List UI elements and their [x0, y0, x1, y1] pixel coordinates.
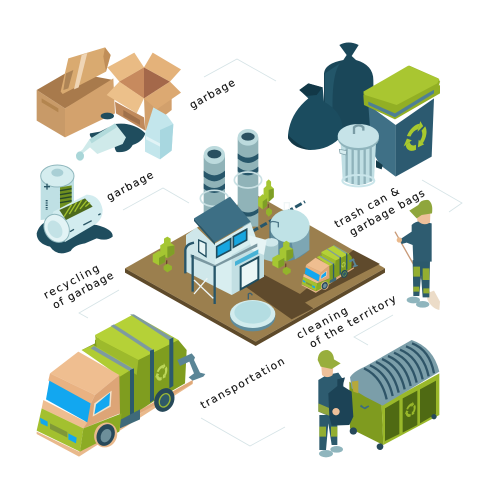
- recycle symbol on dumpster: [404, 399, 417, 421]
- worker legs: [319, 415, 343, 457]
- illustration: worker with broom: [395, 200, 440, 310]
- factory building: [185, 197, 267, 304]
- lying battery: [39, 195, 103, 247]
- hand: [332, 408, 340, 415]
- metal trash can: [338, 124, 379, 186]
- upright battery: [41, 165, 74, 220]
- legs and boots: [407, 260, 430, 308]
- platform base: [125, 194, 385, 346]
- domed sewage tank: [230, 293, 275, 331]
- label: trash can and bags, line 2: garbage bags: [348, 187, 427, 239]
- black garbage bag: [328, 377, 353, 426]
- worker torso: [318, 373, 343, 417]
- pipe: [252, 202, 305, 232]
- green dumpster: [349, 340, 439, 450]
- tree left: [153, 237, 174, 272]
- back garbage bag: [324, 42, 374, 130]
- open cardboard box: [107, 53, 181, 131]
- long cardboard box: [37, 47, 115, 137]
- illustration: large garbage truck: [37, 314, 205, 457]
- recycle symbol on bin: [402, 116, 430, 159]
- broom: [395, 232, 440, 310]
- green belt: [318, 403, 330, 416]
- bracket lines: [79, 59, 462, 446]
- smokestacks: [200, 129, 262, 227]
- dark puddle: [90, 113, 145, 152]
- paper carton: [145, 107, 173, 159]
- glass bottle: [76, 123, 126, 161]
- front garbage bag: [288, 83, 343, 150]
- hand: [397, 237, 402, 243]
- label: recycling, line 1: recycling: [42, 262, 101, 302]
- label: trash can and bags, line 1: trash can &: [333, 185, 401, 231]
- illustration: trash bags and bins: [288, 42, 440, 186]
- small truck: [302, 245, 358, 293]
- green cap: [409, 200, 432, 218]
- label: recycling, line 2: of garbage: [51, 270, 116, 312]
- tree front: [272, 241, 293, 275]
- label: transportation: transportation: [199, 356, 287, 412]
- label: cleaning, line 1: cleaning: [295, 305, 350, 342]
- torso: [400, 221, 432, 262]
- illustration: recycling plant on platform: [125, 129, 385, 346]
- label: garbage (batteries): garbage: [105, 169, 155, 204]
- tree behind: [258, 179, 274, 217]
- illustration: cardboard boxes and waste: [37, 47, 181, 161]
- illustration: worker with bag and dumpster: [318, 340, 439, 457]
- face: [416, 207, 431, 224]
- face: [321, 366, 333, 377]
- label: cleaning, line 2: of the territory: [308, 293, 398, 351]
- storage tank: [264, 203, 310, 262]
- recycling wheelie bin: [363, 66, 440, 177]
- illustration: batteries: [37, 165, 113, 253]
- battery puddle: [37, 220, 113, 253]
- label: garbage (boxes): garbage: [188, 77, 237, 112]
- green cap: [318, 350, 341, 369]
